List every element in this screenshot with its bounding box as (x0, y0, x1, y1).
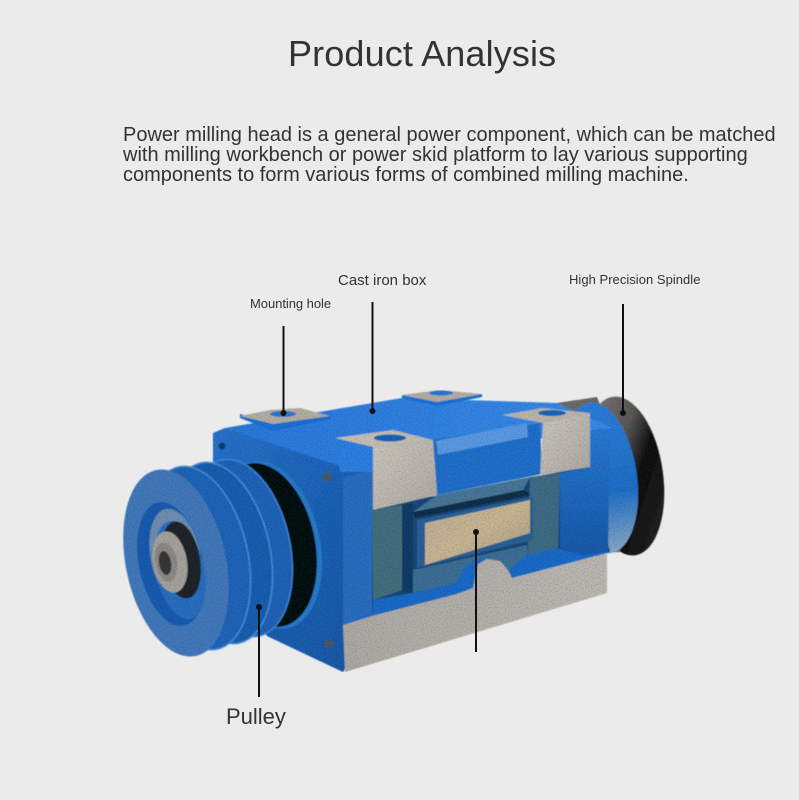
mounting plate left (240, 408, 331, 431)
label: pulley: Pulley (226, 704, 286, 729)
grey block front (335, 430, 437, 510)
machine: milling head (107, 390, 674, 672)
label: high precision spindle: High Precision Spindle (569, 272, 700, 287)
grey base (343, 553, 607, 672)
side column (343, 470, 373, 626)
label: mounting hole: Mounting hole (250, 296, 331, 311)
callout line: cast iron box (370, 302, 376, 414)
intro paragraph: Power milling head is a general power component, which can be matched (123, 124, 776, 146)
mounting plate rear (402, 390, 482, 406)
intro paragraph: components to form various forms of combined milling machine. (123, 164, 689, 186)
recess (372, 466, 610, 616)
intro paragraph: with milling workbench or power skid platform to lay various supporting (123, 144, 748, 166)
mounting screw holes (218, 442, 334, 648)
pulley hub nut (148, 518, 206, 602)
intro paragraph (123, 124, 776, 186)
blue section between blocks (433, 423, 542, 495)
callout line: pulley (256, 604, 262, 697)
callout line: mounting hole (280, 326, 286, 416)
grey block back (502, 408, 590, 475)
black hub behind pulley (201, 451, 337, 639)
front face (213, 428, 373, 672)
title: Product Analysis (288, 33, 556, 74)
pulley (107, 450, 308, 666)
callout line: spindle (620, 304, 626, 416)
cast iron box: top face (225, 398, 612, 474)
name plate (417, 497, 533, 568)
spindle housing (553, 391, 674, 561)
right column (560, 428, 610, 556)
base floor (343, 548, 607, 628)
callout line: name plate (473, 529, 479, 652)
label: cast iron box: Cast iron box (338, 272, 426, 289)
